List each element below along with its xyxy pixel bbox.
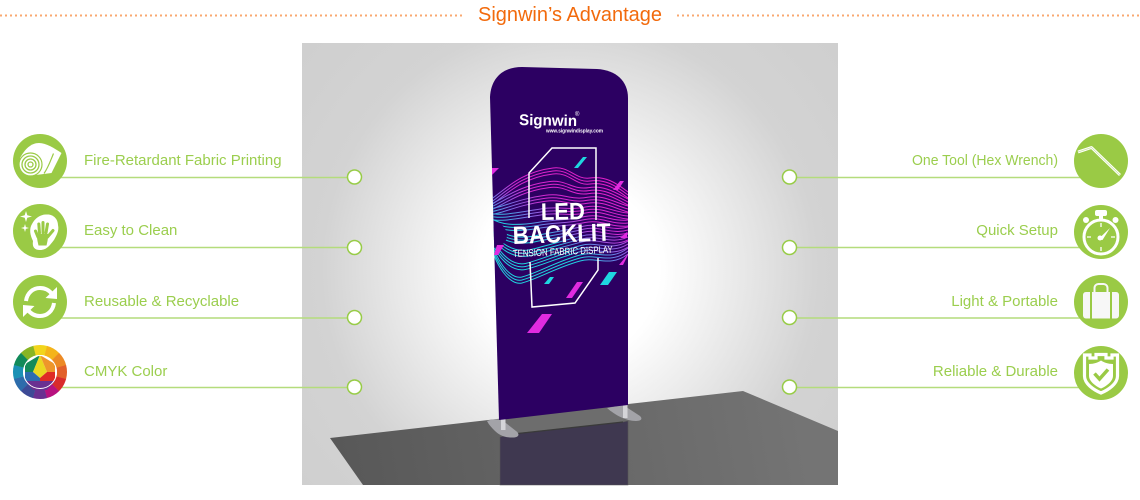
leader line <box>60 176 347 178</box>
banner headline BACKLIT: BACKLIT <box>512 219 611 250</box>
feature: CMYK Color <box>9 341 362 403</box>
panel: product photo <box>302 43 838 485</box>
connector dot <box>348 310 362 324</box>
leader line <box>60 317 347 319</box>
connector dot <box>782 240 796 254</box>
feature: Light & Portable <box>782 275 1128 329</box>
feature: Easy to Clean <box>13 204 362 258</box>
feature: Quick Setup <box>782 205 1128 259</box>
base strip under banner <box>499 405 628 433</box>
banner subhead: TENSION FABRIC DISPLAY <box>513 245 613 260</box>
label: Fire-Retardant Fabric Printing <box>84 152 282 169</box>
backdrop <box>302 43 838 485</box>
label: One Tool (Hex Wrench) <box>912 152 1058 169</box>
label: Easy to Clean <box>84 222 177 239</box>
feature: One Tool (Hex Wrench) <box>782 134 1128 188</box>
label: Quick Setup <box>976 222 1058 239</box>
leader line <box>797 176 1082 178</box>
banner reflection <box>500 421 628 485</box>
hexagon frame upper <box>529 148 596 220</box>
leader line <box>797 246 1082 248</box>
feature: Fire-Retardant Fabric Printing <box>13 134 362 188</box>
label: Reliable & Durable <box>933 363 1058 380</box>
title: Signwin’s Advantage <box>478 4 662 26</box>
wave line artwork <box>490 168 628 283</box>
banner: LED backlit tension fabric display <box>490 67 628 420</box>
connector dot <box>782 310 796 324</box>
connector dot <box>782 170 796 184</box>
hexagon frame lower <box>530 258 598 307</box>
label: Reusable & Recyclable <box>84 293 239 310</box>
banner headline LED: LED <box>541 198 585 226</box>
icon: hex wrench <box>1074 134 1128 188</box>
header dotted rule right <box>677 14 1140 16</box>
icon: fabric roll <box>13 134 67 188</box>
icon: stopwatch <box>1074 205 1128 259</box>
connector dot <box>348 380 362 394</box>
leader line <box>60 386 347 388</box>
header dotted rule left <box>0 14 463 16</box>
connector dot <box>348 170 362 184</box>
icon: cloth and hand <box>13 204 67 258</box>
label: Light & Portable <box>951 293 1058 310</box>
connector dot <box>348 240 362 254</box>
feature: Reliable & Durable <box>782 346 1128 400</box>
leader line <box>797 386 1082 388</box>
icon: suitcase <box>1074 275 1128 329</box>
floor <box>330 391 838 485</box>
registered mark: ® <box>575 111 580 118</box>
icon: shield with check <box>1074 346 1128 400</box>
banner logo: Signwin <box>519 112 577 130</box>
leader line <box>60 246 347 248</box>
connector dot <box>782 380 796 394</box>
icon: colour wheel <box>9 341 71 403</box>
feature: Reusable & Recyclable <box>13 275 362 329</box>
right foot <box>607 405 641 421</box>
left foot <box>487 419 518 438</box>
banner fabric <box>490 67 628 420</box>
label: CMYK Color <box>84 363 167 380</box>
banner url: www.signwindisplay.com <box>545 128 603 134</box>
icon: recycle arrows <box>13 275 67 329</box>
accent shapes <box>492 157 628 333</box>
leader line <box>797 317 1082 319</box>
